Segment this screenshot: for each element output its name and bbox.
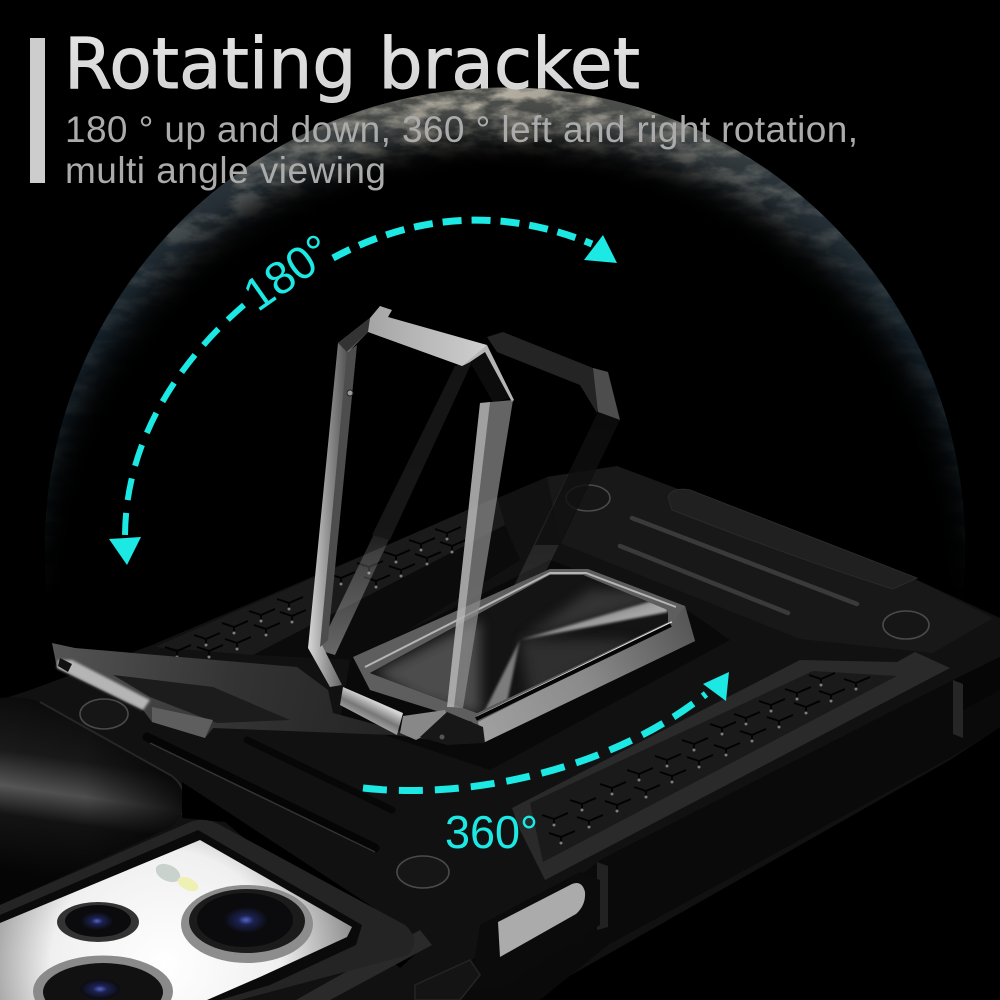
large lens: [181, 885, 313, 963]
hinge corner block: [420, 712, 485, 745]
dashed arc left: [125, 305, 244, 537]
360 degree label: 360°: [445, 806, 538, 858]
small lens: [57, 902, 139, 942]
raised bumper: [668, 489, 917, 589]
case base: [0, 466, 1000, 1000]
white camera window: [0, 840, 352, 1000]
plate outer frame: [353, 569, 695, 743]
rotating hinge: [340, 687, 485, 745]
lower lens: [33, 955, 173, 1000]
case side face: [420, 657, 1000, 1000]
arrowhead left: [109, 537, 141, 565]
silver front strip: [478, 606, 695, 743]
subtitle line 2: multi angle viewing: [65, 150, 386, 191]
hinge pin: [400, 710, 450, 740]
left bar: [308, 343, 350, 687]
screws on bars: [347, 390, 353, 396]
back bracket corner facet: [593, 368, 620, 420]
upper textured grip panel: [155, 497, 520, 660]
lying bracket body: [52, 643, 433, 740]
silver side button: [470, 872, 600, 990]
groove lines: [147, 518, 857, 852]
right black facet: [470, 352, 512, 402]
back bracket inner strut: [318, 362, 472, 655]
brushed metal sheen: [370, 575, 668, 713]
lying bracket corner highlight: [58, 658, 72, 672]
camera module: [0, 840, 352, 1000]
dashed arc bottom: [363, 694, 706, 791]
upper right raised plate: [547, 466, 993, 653]
back bracket top bar: [487, 332, 608, 413]
camera frame inner lip: [0, 830, 362, 1000]
dashed arc top: [333, 220, 592, 258]
gap between strip and camera frame: [182, 782, 420, 968]
lying bracket facet: [152, 707, 213, 738]
180 degree label: 180°: [234, 224, 341, 321]
flash: [153, 860, 201, 894]
arrow: 180 degree rotation: [109, 220, 617, 565]
top bar dark notch: [338, 318, 370, 352]
earth globe backdrop: [45, 88, 965, 543]
heading accent bar: [30, 38, 45, 183]
black side switch: [415, 960, 480, 1000]
lying bracket silver edge: [57, 660, 150, 710]
title: Rotating bracket: [64, 23, 640, 105]
camera frame: [0, 820, 414, 1000]
lying bracket opening: [113, 675, 290, 723]
ring mount recess: [340, 560, 730, 770]
plate highlight edges: [365, 573, 676, 667]
screws: [80, 485, 929, 888]
lying bracket position: [52, 643, 433, 740]
camera slider cover: [0, 695, 190, 907]
arrow: 360 degree rotation: [363, 672, 729, 858]
front raised ring bracket: [308, 306, 514, 708]
back bracket side bar: [453, 412, 620, 712]
phone case body: [0, 466, 1000, 1000]
left bar inner dark side: [320, 345, 357, 647]
lower textured grip panel: [512, 652, 950, 880]
arrowhead top: [584, 235, 617, 263]
arrowhead bottom: [703, 672, 729, 701]
plate dark inner: [370, 575, 668, 713]
top bar: [338, 306, 487, 366]
subtitle text: [65, 109, 858, 191]
camera frame bevel: [296, 930, 432, 1000]
subtitle line 1: 180 ° up and down, 360 ° left and right rotation,: [65, 109, 858, 150]
right bar: [447, 400, 513, 708]
hinge cylinder: [340, 687, 403, 735]
back bracket position: [318, 332, 620, 712]
base plate of ring holder: [353, 569, 695, 743]
